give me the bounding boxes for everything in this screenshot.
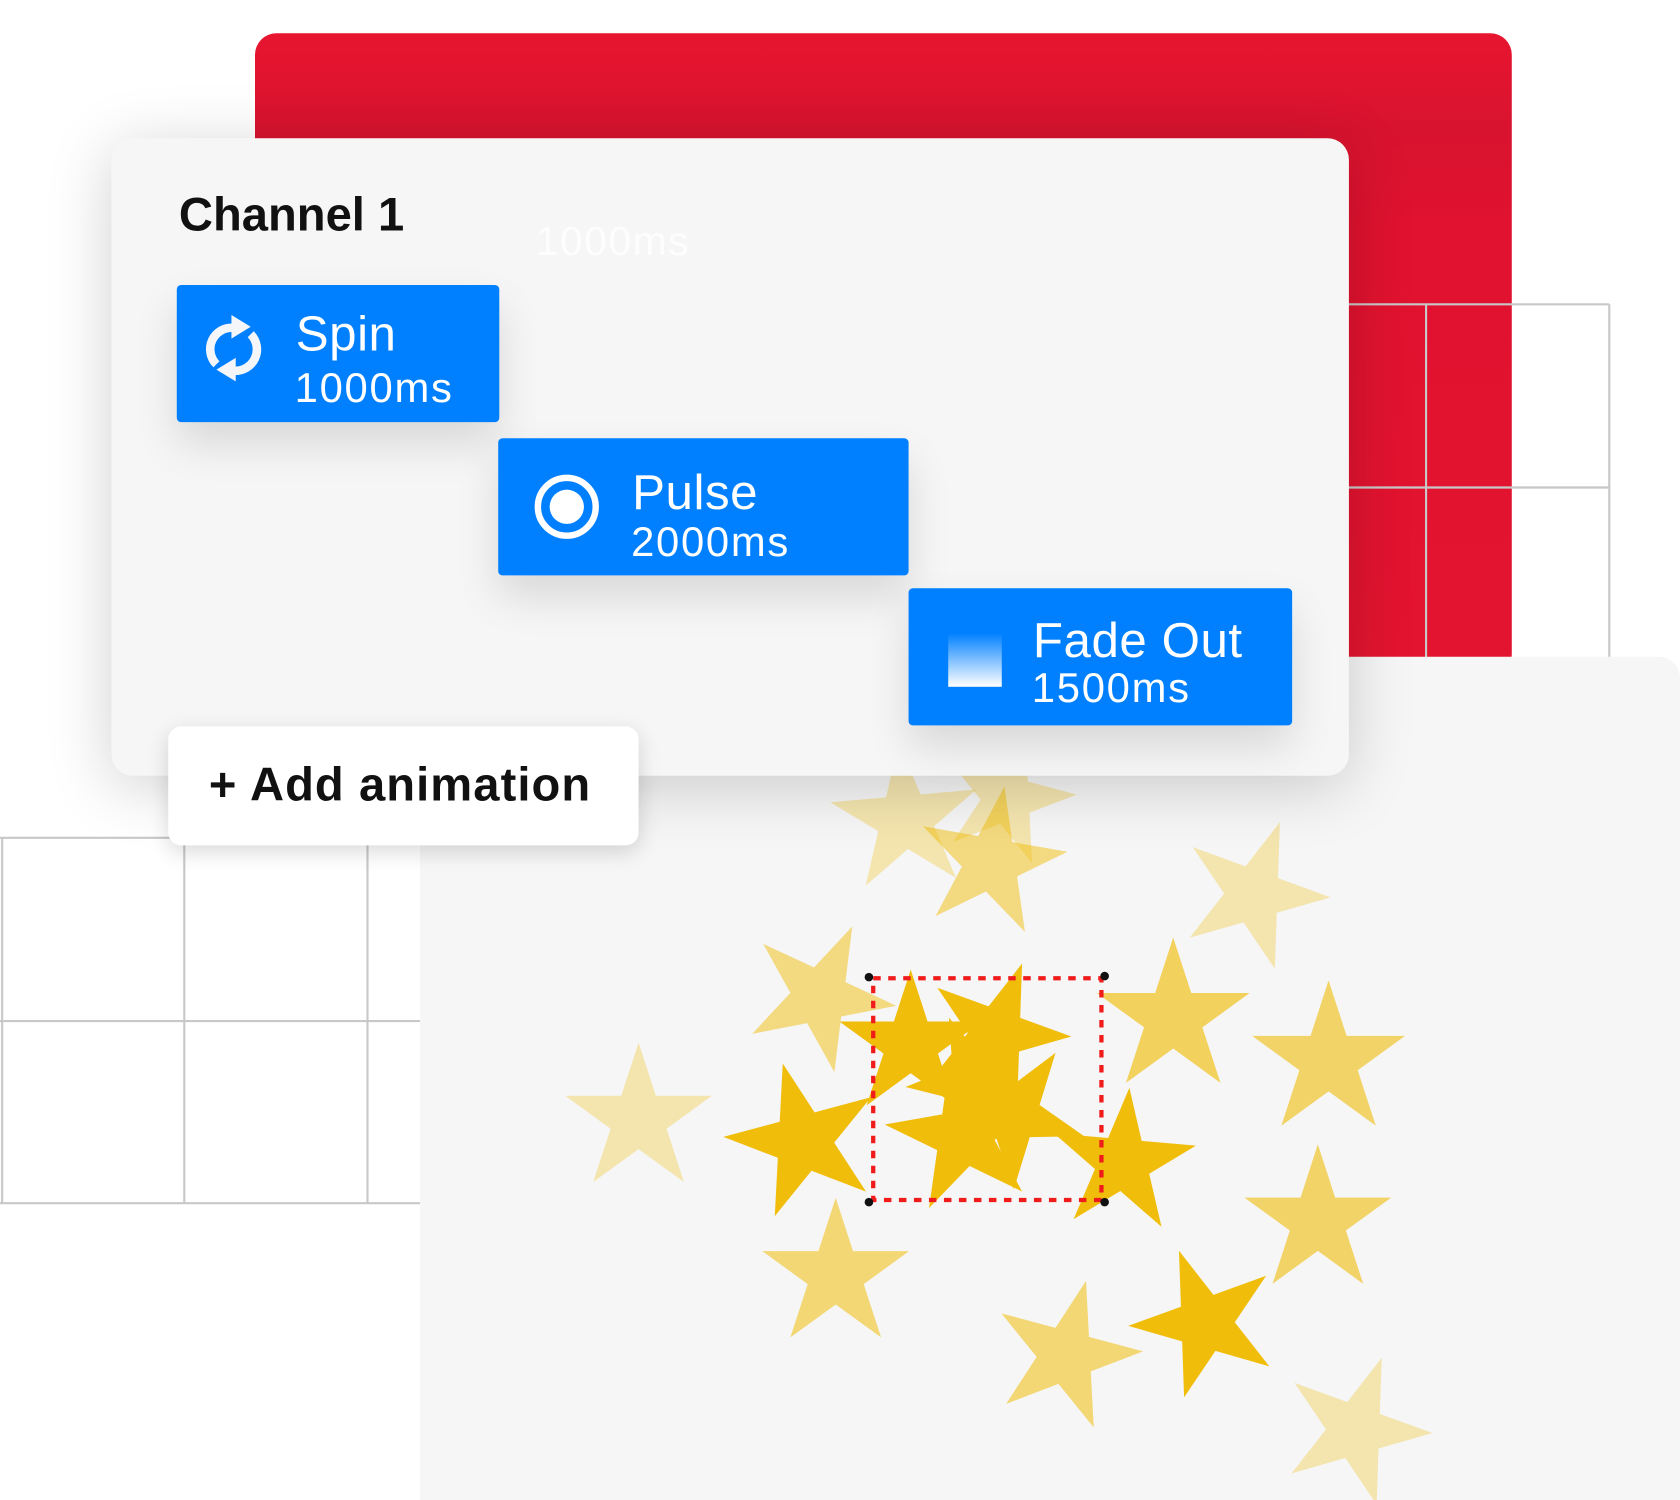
- icon: fade square: [948, 633, 1002, 687]
- channel card: [111, 138, 1349, 776]
- block: Pulse: 2000ms: [631, 520, 790, 566]
- red back panel: [255, 33, 1512, 676]
- block: Fade Out: [909, 588, 1292, 725]
- faint label: 1000ms: [536, 220, 690, 265]
- block: Fade Out: 1500ms: [1032, 665, 1191, 711]
- heading: Channel 1: Channel 1: [179, 189, 404, 241]
- icon: pulse: [534, 474, 599, 539]
- block: Pulse: Pulse: [632, 464, 758, 520]
- grid top right: [1348, 303, 1610, 657]
- block: Fade Out: Fade Out: [1033, 612, 1243, 668]
- bottom stage panel with stars: [420, 657, 1680, 1500]
- button: Add animation: + Add animation: [209, 759, 591, 811]
- icon: spin: [206, 315, 262, 382]
- grid bottom left: [0, 836, 420, 1204]
- block: Pulse: [498, 438, 909, 575]
- block: Spin: 1000ms: [295, 365, 454, 411]
- button: Add animation: [168, 726, 639, 845]
- block: Spin: [177, 285, 499, 422]
- block: Spin: Spin: [296, 305, 397, 361]
